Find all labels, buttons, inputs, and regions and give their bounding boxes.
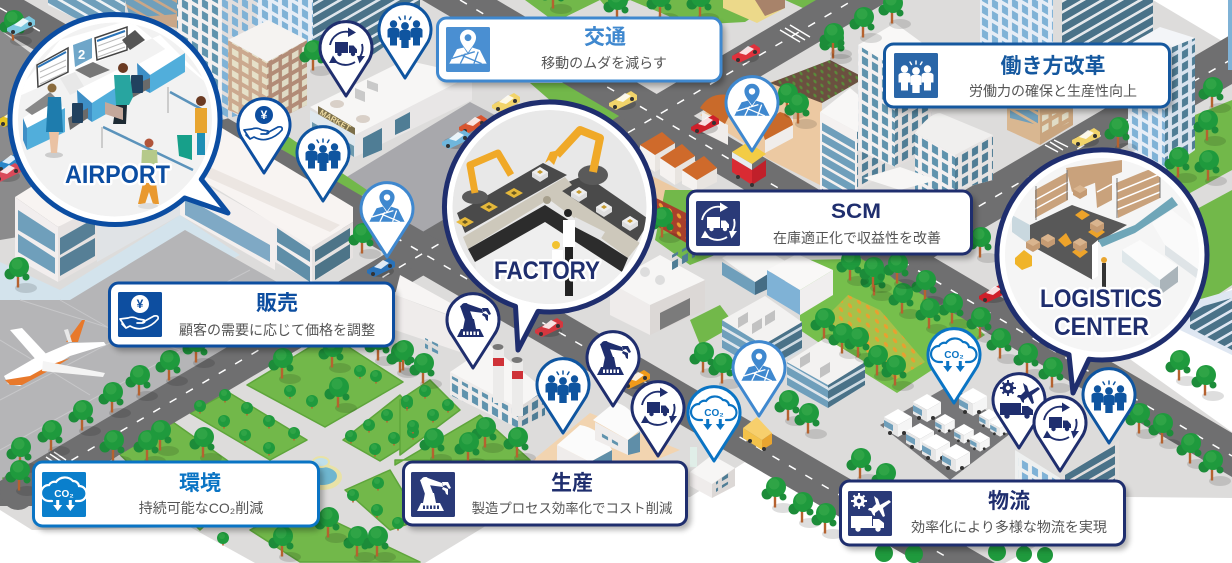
building: glass office one — [722, 296, 802, 373]
building: factory with chimneys — [450, 344, 545, 428]
sandy soil by houses — [640, 170, 690, 210]
building: market: MARKET — [318, 108, 352, 133]
green field beside houses — [655, 190, 790, 265]
building: tall white tower right — [858, 23, 932, 167]
label: FACTORY: FACTORY — [494, 257, 600, 285]
panel: SCM: SCM — [831, 200, 881, 223]
pin: map (bus) — [726, 77, 778, 151]
building: white low block — [863, 167, 937, 190]
left wing — [15, 197, 58, 282]
terminal roof — [197, 128, 353, 247]
building: top left glass block — [48, 0, 177, 30]
callout bubble: airport — [10, 14, 228, 224]
panel: 生産: 生産 — [551, 472, 593, 495]
connector — [97, 175, 180, 262]
panel: 販売: 顧客の需要に応じて価格を調整 — [179, 322, 375, 338]
products — [532, 167, 548, 182]
panel: 物流 — [840, 481, 1129, 550]
icon: map — [446, 27, 490, 72]
workers — [563, 220, 575, 247]
pin: robot (factory) — [447, 294, 499, 368]
icon: logistics — [848, 491, 892, 536]
pin: map (yellow bus) — [733, 342, 785, 416]
control panel — [573, 217, 605, 240]
panel: SCM: 在庫適正化で収益性を改善 — [773, 230, 941, 246]
orange flower field — [650, 195, 690, 245]
pin: CO2 (plant) — [688, 387, 740, 461]
floor — [475, 222, 622, 310]
panel: SCM — [688, 191, 976, 259]
bubble body — [10, 14, 228, 224]
sandy warehouse yard — [533, 413, 680, 475]
pin: CO2 (truck lot) — [928, 329, 980, 403]
light parking lot — [345, 102, 600, 270]
panel: 働き方改革: 労働力の確保と生産性向上 — [969, 83, 1137, 99]
robots — [462, 190, 488, 204]
icon: people — [894, 53, 938, 98]
icon: robot arm — [411, 472, 455, 517]
building: light blue tower — [257, 0, 313, 45]
forklift — [1015, 250, 1032, 270]
panel: 交通: 移動のムダを減らす — [541, 55, 667, 71]
building: arched warehouses — [557, 402, 640, 480]
building: striped glass tower — [313, 0, 420, 62]
vehicles — [0, 16, 1100, 389]
panel: 生産 — [404, 462, 691, 530]
pin: CO2 (plant): CO₂ — [704, 408, 724, 419]
bubble body — [445, 102, 655, 350]
panel: 販売 — [110, 283, 398, 351]
shelves — [1035, 160, 1160, 218]
airport interior scene: 2 — [78, 47, 85, 62]
pin: people (airport) — [297, 127, 349, 201]
crosswalks — [46, 25, 1068, 465]
conveyor wall — [468, 205, 545, 262]
label: LOGISTICS CENTER: LOGISTICS — [1040, 285, 1162, 313]
bubble body — [997, 150, 1207, 393]
panel: 販売: 販売 — [256, 292, 298, 315]
pin: truck cycle (market) — [320, 22, 372, 96]
icon: CO2 cloud — [41, 472, 86, 517]
pin: logistics — [993, 374, 1045, 448]
pin: people (logistics) — [1083, 369, 1135, 443]
pin: robot (warehouse) — [587, 332, 639, 406]
panel: 働き方改革 — [884, 44, 1174, 112]
green strip beside airport — [272, 133, 367, 200]
building: small offices — [722, 242, 833, 315]
large green field — [800, 258, 985, 393]
airport interior scene — [10, 20, 215, 216]
conveyor rails — [463, 177, 572, 249]
label: LOGISTICS CENTER: CENTER — [1054, 313, 1149, 341]
label: LOGISTICS CENTER — [1040, 285, 1162, 341]
cartons and AGVs — [1075, 210, 1090, 220]
panel: 交通: 交通 — [584, 26, 626, 49]
delivery trucks — [1152, 210, 1199, 275]
building: low white block near factory — [395, 275, 463, 355]
fountain — [302, 457, 342, 490]
building: tan lower block — [1007, 108, 1073, 145]
icon: yen hand: ¥ — [137, 297, 144, 311]
building: top tall white tower — [177, 0, 257, 120]
pin: CO2 (truck lot): CO₂ — [944, 350, 964, 361]
pin: people (factory) — [537, 359, 589, 433]
yellow bus — [743, 417, 772, 451]
panel: 物流: 物流 — [988, 490, 1030, 513]
building: blue stripe office — [820, 88, 885, 190]
building: airport terminal — [15, 128, 353, 282]
top green lawns — [525, 0, 855, 135]
panel: 働き方改革: 働き方改革 — [1000, 55, 1106, 78]
wall — [1012, 216, 1030, 242]
callout bubble: factory — [445, 102, 655, 350]
building: top towers — [980, 0, 1232, 70]
parked delivery trucks — [884, 388, 1010, 472]
building: factory annex — [610, 242, 705, 335]
building: orange roofed houses — [640, 132, 717, 192]
warehouse interior scene — [1005, 158, 1199, 352]
pin: people (market) — [379, 4, 431, 78]
callout bubble: logistics center — [997, 150, 1207, 393]
terminal front wall — [180, 170, 275, 270]
panel: 生産: 製造プロセス効率化でコスト削減 — [472, 500, 673, 516]
conveyor belts — [457, 163, 567, 233]
airplane — [4, 320, 106, 386]
building: lower right office — [1180, 290, 1232, 355]
panel: 物流: 効率化により多様な物流を実現 — [911, 519, 1107, 535]
pin: map (airport) — [361, 183, 413, 257]
building: market — [310, 60, 472, 158]
building: small plant — [690, 447, 735, 498]
airport apron — [0, 30, 300, 505]
worker — [1102, 263, 1106, 287]
brown crop field — [770, 60, 865, 103]
panel: 環境: 環境 — [179, 472, 221, 495]
park green blocks — [3, 335, 530, 562]
icon: truck cycle — [696, 201, 740, 246]
warehouse floor — [1030, 205, 1127, 280]
right side green lawns — [690, 100, 1232, 345]
building: tan office — [228, 20, 307, 125]
panel: 環境 — [34, 462, 323, 531]
truck lot — [880, 385, 1015, 480]
icon: CO2 cloud: CO₂ — [54, 489, 74, 500]
building: logistics center base — [1015, 440, 1119, 495]
dock canopy — [1098, 197, 1178, 247]
red double decker bus — [732, 142, 766, 187]
pin: yen hand — [238, 99, 290, 173]
pin: truck cycle (logistics) — [1034, 397, 1086, 471]
panel: 交通 — [438, 18, 725, 86]
pin: truck cycle (warehouse) — [632, 382, 684, 456]
building: glass office two — [787, 338, 865, 408]
sandy soil by barns — [700, 80, 822, 185]
building: arched barns — [700, 95, 793, 153]
panel: 環境: 持続可能なCO₂削減 — [139, 500, 263, 516]
pale plaza around airport — [0, 215, 240, 320]
building: yellow houses — [723, 0, 785, 23]
factory interior scene — [452, 110, 650, 310]
pin: yen hand: ¥ — [261, 108, 268, 122]
building: arched office — [915, 113, 993, 190]
icon: yen hand — [118, 292, 162, 337]
label: AIRPORT: AIRPORT — [65, 161, 170, 189]
building: tall pale blue tower — [1128, 27, 1195, 172]
terminal right block — [275, 223, 312, 282]
